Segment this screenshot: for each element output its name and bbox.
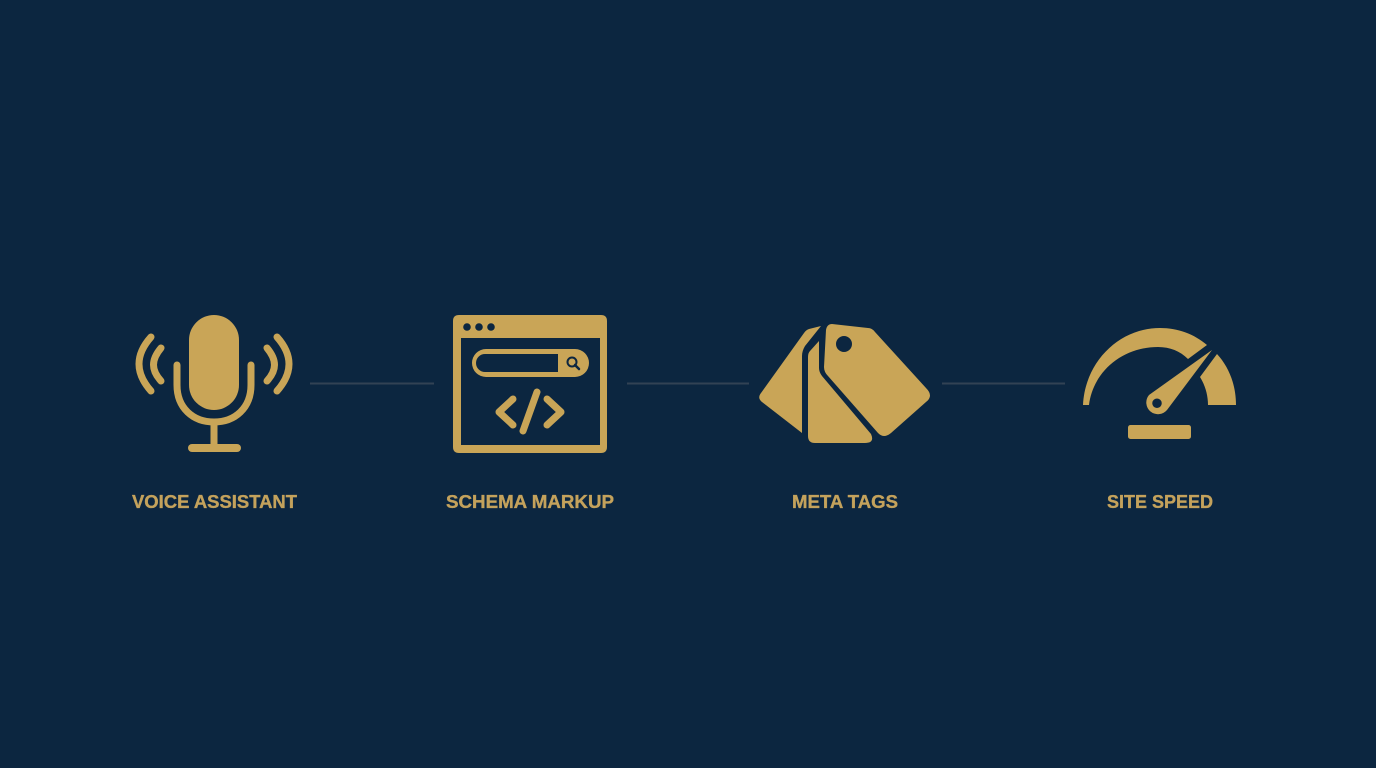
item: meta tags bbox=[759, 324, 930, 512]
label: voice assistant: VOICE ASSISTANT bbox=[132, 492, 297, 512]
connector line 3 bbox=[942, 382, 1065, 384]
icon: speedometer bbox=[1083, 328, 1236, 439]
icon: browser window with code bbox=[453, 315, 607, 453]
icon: price tags bbox=[759, 324, 930, 443]
connector line 2 bbox=[627, 382, 749, 384]
label: site speed: SITE SPEED bbox=[1107, 492, 1213, 512]
icon: microphone bbox=[139, 315, 289, 448]
connector line 1 bbox=[310, 382, 434, 384]
label: meta tags: META TAGS bbox=[792, 492, 898, 512]
item: voice assistant bbox=[132, 315, 297, 512]
item: schema markup bbox=[446, 315, 614, 512]
item: site speed bbox=[1083, 328, 1236, 512]
label: schema markup: SCHEMA MARKUP bbox=[446, 492, 614, 512]
